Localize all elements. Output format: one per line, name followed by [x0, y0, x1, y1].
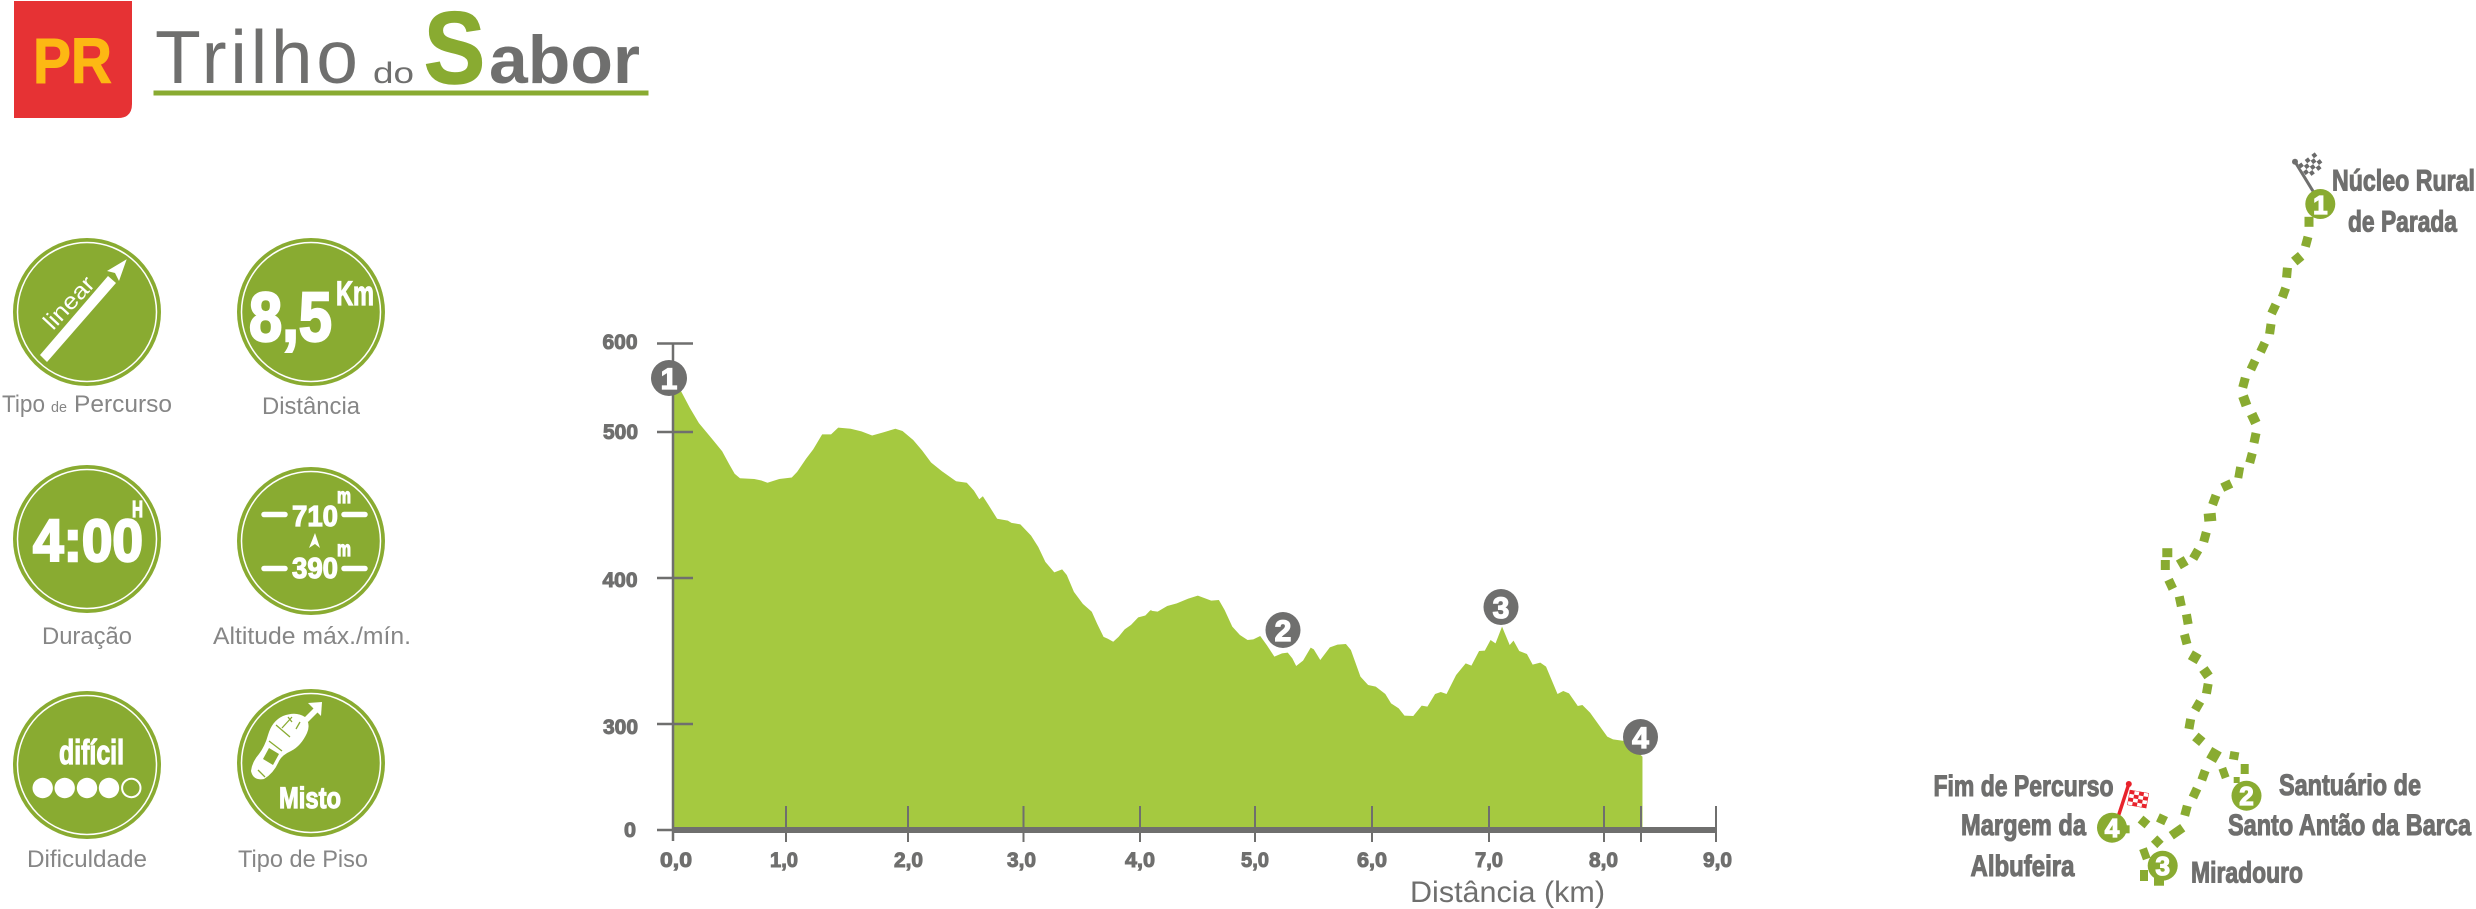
y axis labels: [602, 331, 638, 842]
stat: tipo de percurso: Tipo: [2, 391, 45, 418]
map point 4: 4: [2105, 813, 2120, 843]
panel: route stats: [2, 238, 411, 873]
stat: duracao: H: [132, 496, 143, 522]
label: Fim de Percurso Margem da Albufeira: Margem da: [1961, 809, 2086, 842]
label: Núcleo Rural de Parada: [2332, 164, 2475, 238]
x axis labels: 3,0: [1007, 849, 1036, 872]
label: Miradouro: Miradouro: [2191, 856, 2303, 890]
map point 2: [2232, 781, 2262, 811]
icon: finish flag: [2119, 781, 2149, 815]
chart marker 3: [1484, 589, 1518, 625]
y axis labels: 300: [603, 716, 638, 739]
stat: tipo de piso: Misto: [279, 782, 341, 815]
stat: altitude: m: [337, 538, 351, 561]
stat: altitude: m: [337, 485, 351, 508]
stat: dificuldade: Dificuldade: [27, 846, 147, 873]
stat: distancia: [237, 238, 385, 420]
x axis labels: 0,0: [660, 849, 692, 872]
map point 3: [2148, 851, 2178, 881]
label: Santuário de Santo Antão da Barca: [2228, 769, 2471, 842]
label: Fim de Percurso Margem da Albufeira: Albufeira: [1970, 850, 2075, 883]
stat: tipo de percurso: linear: [38, 270, 100, 334]
map point 1: [2305, 189, 2335, 220]
stat: distancia: Distância: [262, 393, 361, 420]
x axis labels: 9,0: [1703, 849, 1732, 872]
header: [14, 0, 648, 118]
stat: distancia: 8,5: [249, 278, 332, 356]
x axis labels: 8,0: [1589, 849, 1618, 872]
x axis labels: [660, 849, 1732, 872]
label: Fim de Percurso Margem da Albufeira: Fim de Percurso: [1934, 770, 2114, 803]
y axis labels: 600: [602, 331, 638, 354]
chart marker 1: 1: [661, 363, 677, 396]
stat: dificuldade: [13, 691, 161, 873]
x axis labels: 1,0: [770, 849, 798, 872]
stat: duracao: [13, 465, 161, 650]
stat: duracao: Duração: [42, 623, 132, 650]
x axis labels: 7,0: [1475, 849, 1503, 872]
label: Santuário de Santo Antão da Barca: Santuário de: [2279, 769, 2421, 802]
stat: tipo de piso: [237, 689, 385, 873]
chart marker 2: [1266, 612, 1300, 648]
label: Fim de Percurso Margem da Albufeira: [1934, 770, 2114, 883]
x axis title: Distância (km): [1410, 876, 1605, 909]
map point 3: 3: [2155, 851, 2170, 881]
x axis labels: 5,0: [1241, 849, 1269, 872]
x axis labels: 6,0: [1357, 849, 1387, 872]
map point 1: 1: [2313, 190, 2328, 220]
axes: [657, 343, 1716, 842]
stat: tipo de percurso: Percurso: [74, 391, 172, 418]
icon: boot sole: [251, 702, 322, 779]
chart marker 3: 3: [1493, 592, 1509, 625]
PR badge: [14, 1, 132, 118]
area: elevation: [673, 376, 1642, 830]
chart marker 4: 4: [1632, 722, 1649, 755]
stat: distancia: Km: [336, 275, 374, 313]
chart marker 1: [651, 360, 687, 396]
title: [154, 0, 648, 105]
stat: altitude: 390: [292, 553, 338, 585]
y axis labels: 400: [602, 569, 638, 592]
x axis labels: 2,0: [894, 849, 923, 872]
stat: duracao: 4:00: [33, 508, 143, 574]
stat: tipo de piso: Tipo de Piso: [238, 846, 368, 873]
title: do: [373, 57, 414, 90]
y axis labels: 500: [603, 421, 638, 444]
chart marker 2: 2: [1275, 615, 1291, 648]
dotted route line: [2124, 217, 2314, 886]
x axis labels: 4,0: [1125, 849, 1155, 872]
stat: tipo de percurso: [2, 238, 172, 418]
chart: elevation profile: [602, 331, 1732, 909]
stat: altitude: Altitude máx./mín.: [213, 623, 411, 650]
stat: dificuldade: difícil: [59, 734, 124, 772]
PR badge: PR: [33, 25, 112, 97]
y axis labels: 0: [624, 819, 636, 842]
map: route: [1934, 152, 2475, 890]
stat: altitude: 710: [292, 501, 338, 533]
map point 4: [2097, 813, 2127, 843]
chart marker 4: [1623, 719, 1658, 755]
title: Trilho: [155, 15, 358, 99]
icon: start flag: [2292, 152, 2325, 192]
map point 2: 2: [2239, 781, 2254, 811]
stat: tipo de percurso: de: [51, 399, 67, 416]
stat: altitude: [213, 467, 411, 650]
title: abor: [489, 22, 640, 98]
